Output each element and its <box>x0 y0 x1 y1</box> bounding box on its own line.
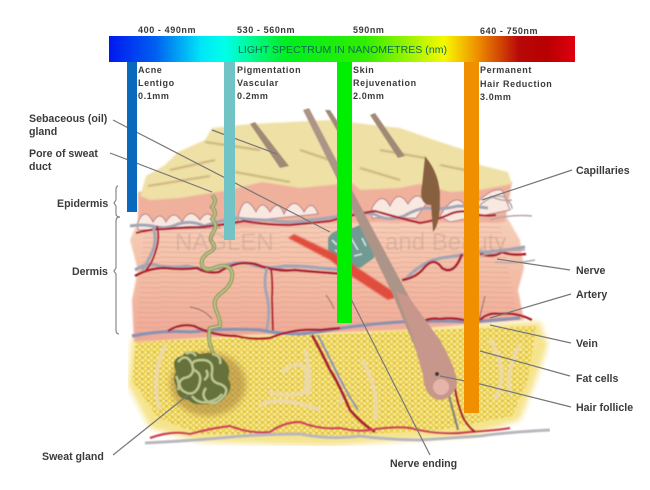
arrector pili muscle <box>288 234 400 300</box>
column text: permanent hair reduction <box>480 65 552 102</box>
papillae wavy band <box>138 190 510 230</box>
column text: acne: Acne <box>138 65 162 75</box>
sebaceous gland <box>328 224 376 268</box>
dermis layer <box>130 205 524 342</box>
light spectrum bar: LIGHT SPECTRUM IN NANOMETRES (nm) <box>238 44 447 56</box>
watermark <box>175 229 506 256</box>
laser column: 530-560nm <box>224 62 235 240</box>
watermark: NAGLEN <box>175 229 274 256</box>
left labels: Dermis <box>72 266 108 278</box>
column text: pigmentation: 0.2mm <box>237 91 269 101</box>
sweat gland <box>170 351 246 416</box>
right labels: Vein <box>576 338 598 350</box>
left labels: duct <box>29 161 52 173</box>
right labels: Capillaries <box>576 165 630 177</box>
wavelength labels: 400 - 490nm <box>138 25 196 35</box>
wavelength labels: 590nm <box>353 25 385 35</box>
laser column: 400-490nm <box>127 62 137 212</box>
main hair shaft <box>303 108 450 372</box>
hair shafts on the surface <box>250 108 457 400</box>
small nerve endings <box>190 295 485 320</box>
column text: pigmentation: Pigmentation <box>237 65 301 75</box>
wavelength labels <box>138 25 538 36</box>
brackets: epidermis and dermis <box>114 186 120 334</box>
skin illustration <box>128 108 550 446</box>
column text: acne <box>138 65 175 101</box>
upper yellow skin surface <box>140 120 512 200</box>
sweat duct <box>202 195 232 368</box>
light spectrum bar <box>109 36 575 62</box>
left labels: gland <box>29 126 57 138</box>
epidermis pink layer <box>138 178 512 226</box>
column text: skin rejuvenation <box>353 65 417 101</box>
hair follicle <box>396 292 457 400</box>
leader lines <box>110 120 572 455</box>
column text: pigmentation: Vascular <box>237 78 279 88</box>
right labels: Fat cells <box>576 373 619 385</box>
capillary bands <box>130 196 550 443</box>
column text: permanent hair reduction: Hair Reduction <box>480 79 552 89</box>
column text: pigmentation <box>237 65 301 101</box>
laser column: 640-750nm <box>464 62 479 413</box>
left labels <box>29 113 108 463</box>
column text: skin rejuvenation: 2.0mm <box>353 91 385 101</box>
watermark: and Beauty <box>385 229 506 256</box>
column text: acne: 0.1mm <box>138 91 170 101</box>
laser column: 590nm <box>337 62 352 323</box>
right labels: Nerve <box>576 265 606 277</box>
right labels: Nerve ending <box>390 458 457 470</box>
column text: skin rejuvenation: Skin <box>353 65 374 75</box>
right labels: Hair follicle <box>576 402 633 414</box>
fat layer <box>128 322 548 446</box>
left labels: Sebaceous (oil) <box>29 113 107 125</box>
column text: acne: Lentigo <box>138 78 175 88</box>
right labels: Artery <box>576 289 607 301</box>
wavelength labels: 530 - 560nm <box>237 25 295 35</box>
column text: permanent hair reduction: 3.0mm <box>480 92 512 102</box>
column text: permanent hair reduction: Permanent <box>480 65 532 75</box>
column text: skin rejuvenation: Rejuvenation <box>353 78 417 88</box>
left labels: Pore of sweat <box>29 148 98 160</box>
left labels: Epidermis <box>57 198 108 210</box>
right labels <box>390 165 633 470</box>
left labels: Sweat gland <box>42 451 104 463</box>
hair emerging from skin <box>421 156 440 232</box>
wavelength labels: 640 - 750nm <box>480 26 538 36</box>
